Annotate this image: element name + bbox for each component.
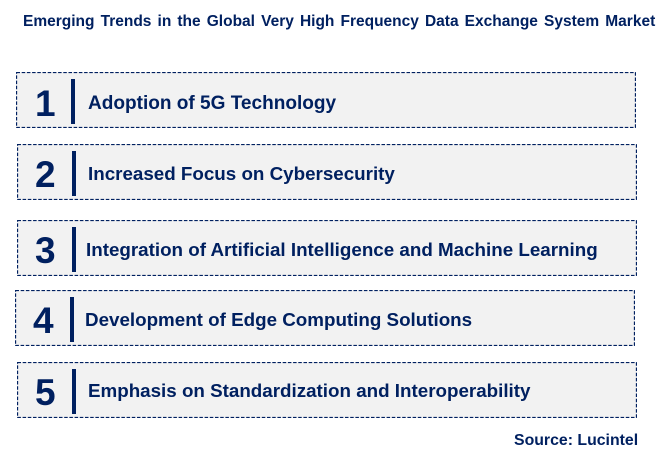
label 4: Development of Edge Computing Solutions: [85, 309, 472, 330]
label 1: Adoption of 5G Technology: [88, 93, 336, 114]
source note: Source: Lucintel: [514, 432, 638, 449]
panel: trend 4: [15, 290, 635, 346]
panel: trend 3: [17, 220, 637, 276]
number 2: 2: [35, 154, 56, 195]
number 1: 1: [35, 83, 56, 124]
divider bar 3: [72, 227, 76, 272]
panel: trend 1: [16, 72, 636, 128]
panel: trend 2: [17, 144, 637, 200]
title: Emerging Trends in the Global Very High Frequency Data Exchange System Market: [23, 13, 655, 30]
divider bar 2: [72, 151, 76, 196]
label 5: Emphasis on Standardization and Interoperability: [88, 380, 530, 401]
divider bar 5: [72, 369, 76, 414]
panel: trend 5: [17, 362, 637, 418]
divider bar 4: [70, 297, 74, 342]
divider bar 1: [71, 79, 75, 124]
number 3: 3: [35, 230, 56, 271]
number 4: 4: [33, 300, 54, 341]
number 5: 5: [35, 372, 56, 413]
label 3: Integration of Artificial Intelligence and Machine Learning: [86, 239, 598, 260]
label 2: Increased Focus on Cybersecurity: [88, 163, 395, 184]
